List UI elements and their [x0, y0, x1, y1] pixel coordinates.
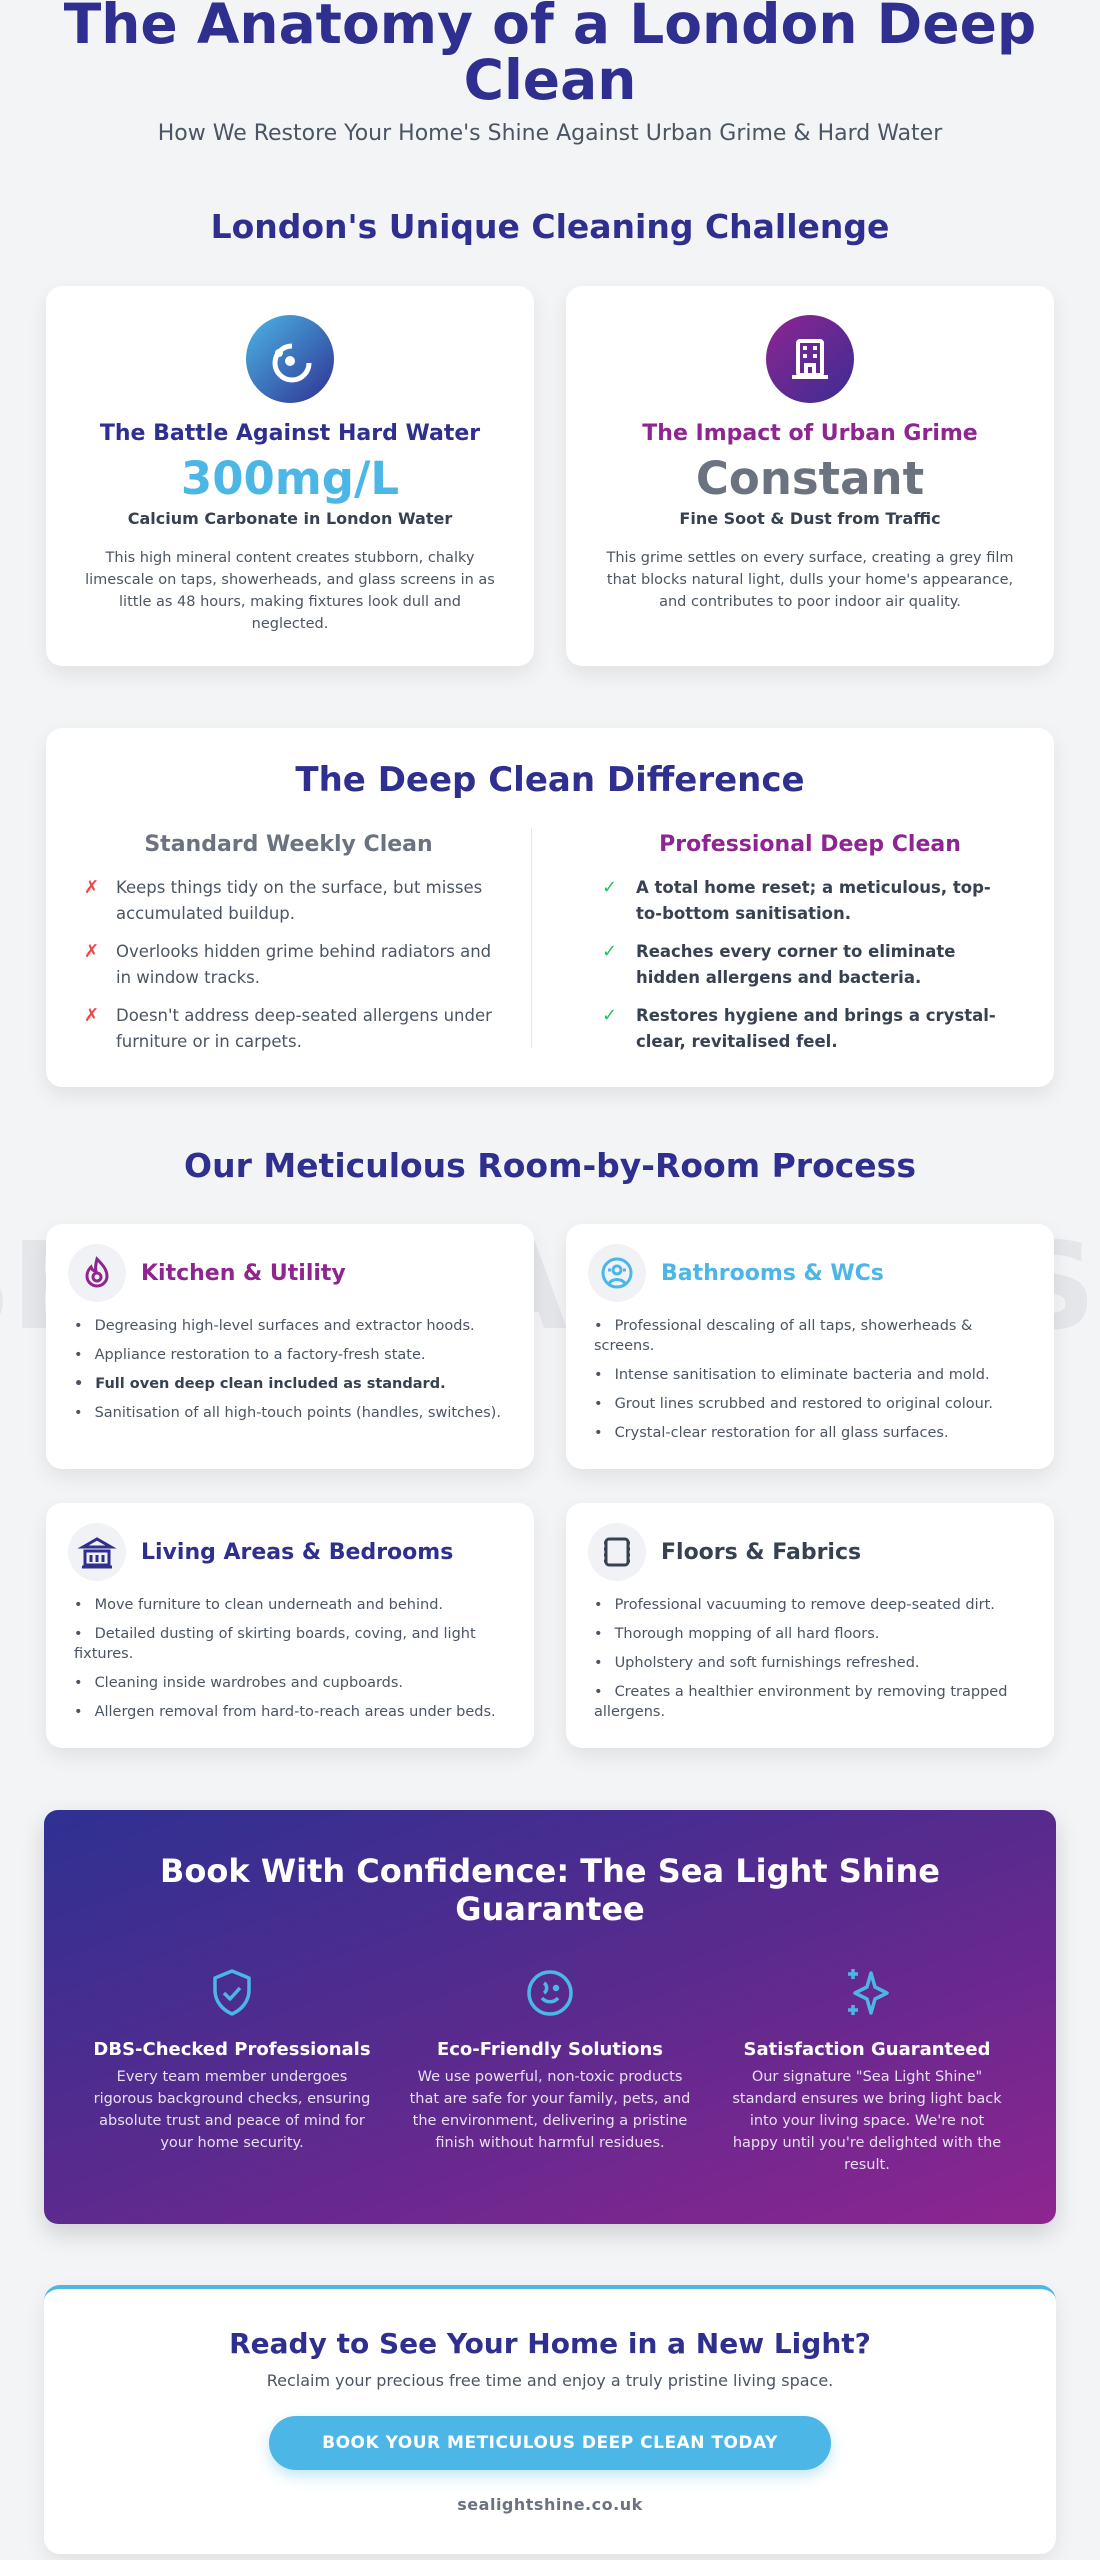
heading	[160, 1852, 940, 1928]
icon: building	[766, 315, 854, 403]
divider	[531, 828, 532, 1048]
column: standard: ✗	[84, 941, 99, 962]
panel: urban grime	[566, 286, 1054, 666]
column: professional: ✓	[602, 1005, 617, 1026]
list: Intense sanitisation to eliminate bacteria and mold.	[615, 1367, 990, 1383]
body: This grime settles on every surface, creating a grey film that blocks natural light, dulls your home's appearance, and contributes to poor indoor air quality.	[606, 550, 1013, 610]
heading: Bathrooms & WCs	[661, 1261, 884, 1286]
panel: hard water	[46, 286, 534, 666]
body: This high mineral content creates stubborn, chalky limescale on taps, showerheads, and glass screens in as little as 48 hours, making fixtures look dull and neglected.	[85, 550, 495, 632]
icon: rug	[588, 1523, 646, 1581]
heading: The Battle Against Hard Water	[100, 421, 480, 446]
item: eco: Eco-Friendly Solutions	[437, 2039, 663, 2060]
list: Grout lines scrubbed and restored to original colour.	[615, 1396, 993, 1412]
button	[269, 2416, 831, 2470]
column: standard: Standard Weekly Clean	[144, 832, 433, 857]
panel: call to action	[44, 2285, 1056, 2554]
list: Degreasing high-level surfaces and extractor hoods.	[95, 1318, 475, 1334]
item: DBS: DBS-Checked Professionals	[93, 2039, 371, 2060]
heading: Ready to See Your Home in a New Light?	[229, 2327, 871, 2360]
item: DBS: Every team member undergoes rigorous background checks, ensuring absolute trust and peace of mind for your home security.	[94, 2069, 370, 2151]
stat: 300mg/L	[181, 452, 399, 505]
list: Crystal-clear restoration for all glass surfaces.	[615, 1425, 949, 1441]
column: professional: Restores hygiene and brings a crystal-clear, revitalised feel.	[636, 1006, 996, 1051]
column: professional: ✓	[602, 877, 617, 898]
panel: kitchen	[46, 1224, 534, 1469]
list: Thorough mopping of all hard floors.	[615, 1626, 879, 1642]
heading: Book With Confidence: The Sea Light Shine	[160, 1852, 940, 1890]
item: eco: We use powerful, non-toxic products that are safe for your family, pets, and the environment, delivering a pristine finish without harmful residues.	[410, 2069, 690, 2151]
item: satisfaction	[732, 1969, 1002, 2173]
column: professional: Professional Deep Clean	[659, 832, 961, 857]
panel: bathrooms	[566, 1224, 1054, 1469]
column: standard: Keeps things tidy on the surface, but misses accumulated buildup.	[116, 878, 482, 923]
item: eco	[410, 1970, 690, 2151]
panel: deep clean difference	[46, 728, 1054, 1087]
panel: floors	[566, 1503, 1054, 1748]
heading: Kitchen & Utility	[141, 1261, 346, 1286]
title	[64, 0, 1036, 112]
list	[76, 1318, 501, 1421]
url: sealightshine.co.uk	[457, 2495, 643, 2514]
list: Sanitisation of all high-touch points (handles, switches).	[95, 1405, 501, 1421]
list: Full oven deep clean included as standard.	[95, 1376, 446, 1392]
heading: Guarantee	[455, 1890, 645, 1928]
subtitle: How We Restore Your Home's Shine Against Urban Grime & Hard Water	[158, 121, 942, 146]
heading: Floors & Fabrics	[661, 1540, 861, 1565]
icon: shield	[213, 1969, 251, 2016]
item: DBS	[93, 1969, 371, 2151]
item: satisfaction: Our signature "Sea Light Shine" standard ensures we bring light back into your living space. We're not happy until you're delighted with the result.	[732, 2069, 1002, 2173]
column: professional: A total home reset; a meticulous, top-to-bottom sanitisation.	[636, 878, 991, 923]
panel: living areas	[46, 1503, 534, 1748]
list: Cleaning inside wardrobes and cupboards.	[95, 1675, 403, 1691]
icon: smile	[527, 1970, 573, 2016]
column: standard: Doesn't address deep-seated allergens under furniture or in carpets.	[116, 1006, 492, 1051]
column: standard: Overlooks hidden grime behind radiators and in window tracks.	[116, 942, 491, 987]
list: Allergen removal from hard-to-reach areas under beds.	[95, 1704, 496, 1720]
icon: sparkles	[848, 1969, 889, 2015]
stat label: Fine Soot & Dust from Traffic	[679, 509, 941, 528]
icon: water	[246, 315, 334, 403]
list: Appliance restoration to a factory-fresh state.	[95, 1347, 426, 1363]
list	[594, 1318, 993, 1441]
title: Clean	[464, 48, 636, 112]
panel: guarantee	[44, 1810, 1056, 2224]
icon: bath	[588, 1244, 646, 1302]
column: professional: ✓	[602, 941, 617, 962]
heading: challenge: London's Unique Cleaning Challenge	[211, 207, 889, 246]
column: standard: ✗	[84, 1005, 99, 1026]
heading: The Deep Clean Difference	[295, 760, 805, 800]
list: Professional descaling of all taps, showerheads & screens.	[594, 1318, 972, 1354]
list	[594, 1597, 1007, 1720]
subtext: Reclaim your precious free time and enjoy a truly pristine living space.	[267, 2371, 833, 2390]
list: Creates a healthier environment by removing trapped allergens.	[594, 1684, 1007, 1720]
icon: flame	[68, 1244, 126, 1302]
column: professional	[602, 832, 996, 1051]
list	[74, 1597, 496, 1720]
stat label: Calcium Carbonate in London Water	[128, 509, 452, 528]
heading: Living Areas & Bedrooms	[141, 1540, 453, 1565]
heading: process: Our Meticulous Room-by-Room Process	[184, 1146, 916, 1185]
list: Move furniture to clean underneath and behind.	[95, 1597, 443, 1613]
column: professional: Reaches every corner to eliminate hidden allergens and bacteria.	[636, 942, 955, 987]
list: Detailed dusting of skirting boards, coving, and light fixtures.	[74, 1626, 476, 1662]
list: Upholstery and soft furnishings refreshed.	[615, 1655, 920, 1671]
stat: Constant	[696, 452, 924, 505]
icon: building	[68, 1523, 126, 1581]
column: standard: ✗	[84, 877, 99, 898]
heading: The Impact of Urban Grime	[642, 421, 978, 446]
item: satisfaction: Satisfaction Guaranteed	[744, 2039, 990, 2060]
column: standard	[84, 832, 492, 1051]
button: BOOK YOUR METICULOUS DEEP CLEAN TODAY	[322, 2433, 778, 2453]
list: Professional vacuuming to remove deep-seated dirt.	[615, 1597, 995, 1613]
